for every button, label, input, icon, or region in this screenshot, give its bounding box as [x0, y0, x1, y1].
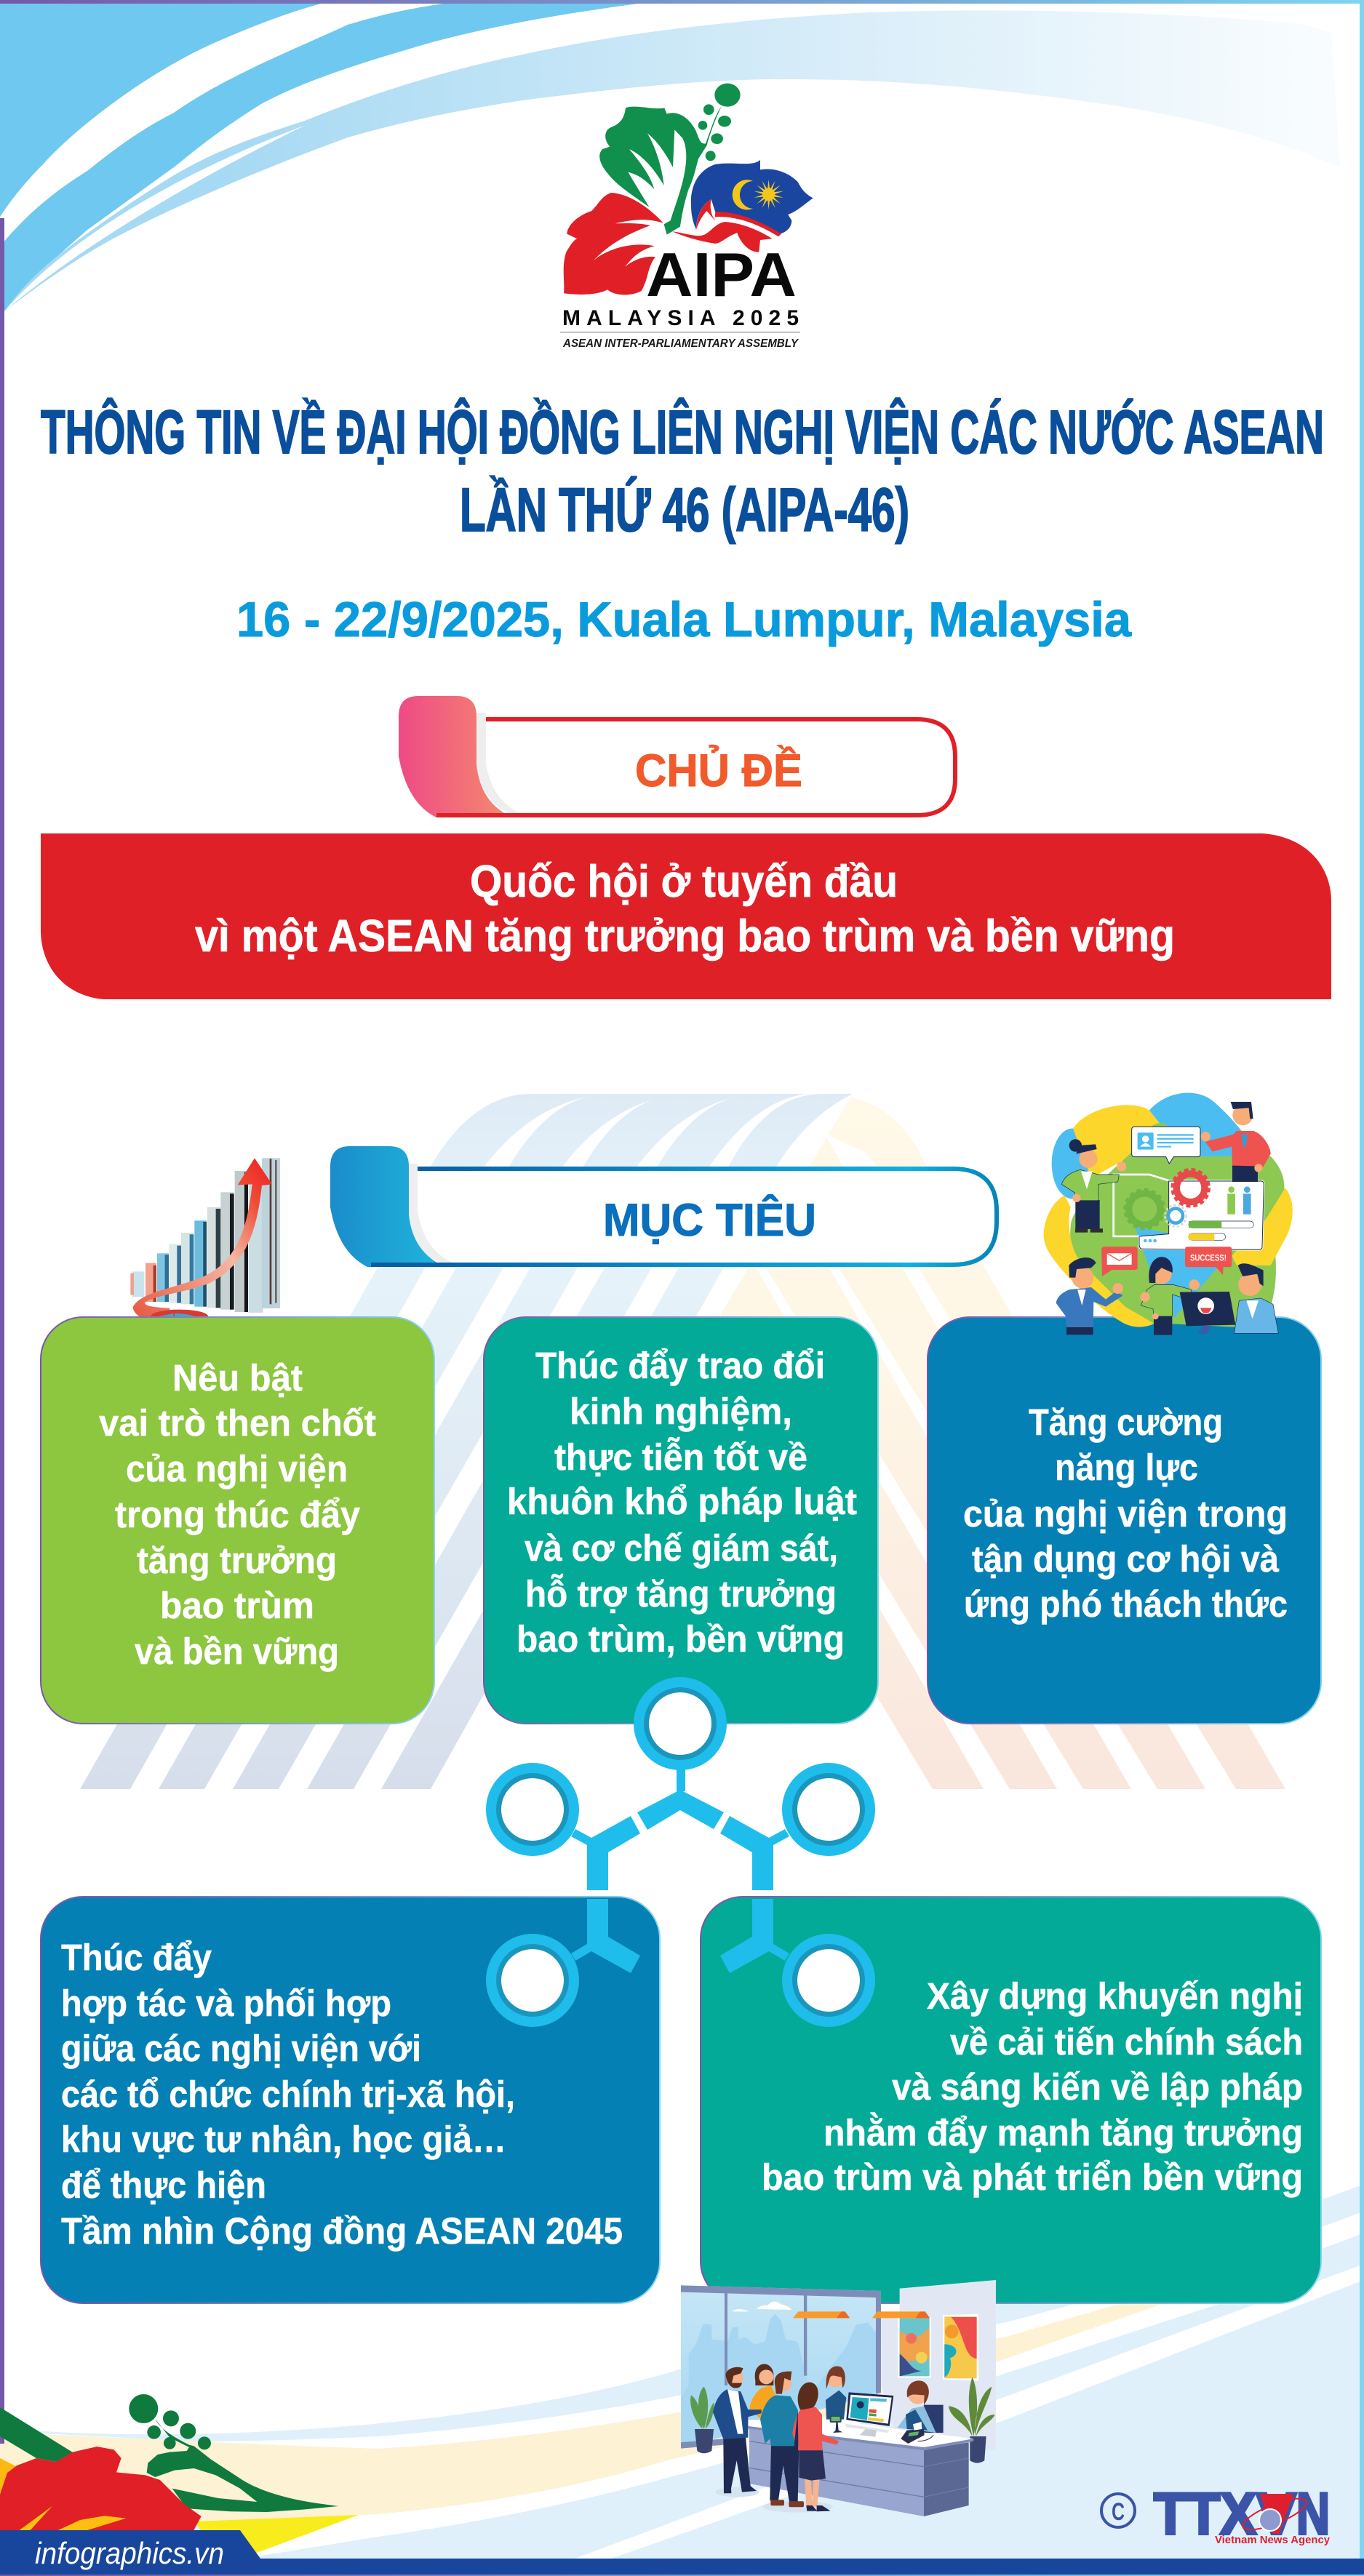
agency wordmark: V [1256, 2481, 1296, 2547]
node bottom left [486, 1934, 579, 2027]
copyright mark [1101, 2494, 1135, 2527]
section header: objectives [330, 1146, 997, 1267]
panel: objective 4: giữa các nghị viện với [61, 2028, 421, 2069]
logo subtitle: MALAYSIA 2025 [562, 306, 799, 330]
agency tagline: Vietnam News Agency [1215, 2534, 1331, 2546]
copyright mark: C [1112, 2498, 1125, 2526]
panel: objective 1: trong thúc đẩy [115, 1494, 361, 1535]
title [41, 398, 1324, 544]
logo: AIPA Malaysia 2025 [560, 84, 813, 350]
logo tagline: ASEAN INTER-PARLIAMENTARY ASSEMBLY [562, 337, 799, 350]
panel: objective 4 [41, 1897, 660, 2303]
panel: objective 5: Xây dựng khuyến nghị [927, 1975, 1303, 2017]
panel: objective 1: bao trùm [160, 1585, 314, 1626]
footer bar [0, 2530, 1364, 2576]
person top right [1201, 1102, 1271, 1182]
logo wordmark AIPA: AIPA [646, 241, 797, 310]
whiteboard [1114, 1175, 1264, 1249]
panel: objective 2: thực tiễn tốt về [554, 1436, 807, 1478]
panel: objective 4: Tầm nhìn Cộng đồng ASEAN 2045 [61, 2210, 623, 2252]
node middle left [486, 1763, 579, 1856]
icon: rising bar chart [130, 1158, 280, 1324]
receptionist left [826, 2391, 846, 2420]
theme heading: CHỦ ĐỀ [635, 745, 802, 796]
panel: objective 2: và cơ chế giám sát, [525, 1527, 838, 1569]
visitor man teal [760, 2372, 804, 2507]
illustration: office reception [681, 2280, 996, 2516]
panel: theme statement: Quốc hội ở tuyến đầu [470, 857, 898, 907]
panel: objective 1: Nêu bật [172, 1357, 303, 1399]
footer site name: infographics.vn [35, 2536, 224, 2570]
payment terminal [901, 2429, 925, 2444]
monitor [846, 2392, 893, 2426]
date and place: 16 - 22/9/2025, Kuala Lumpur, Malaysia [236, 592, 1132, 647]
person at laptop [1180, 1263, 1278, 1334]
panel: objective 4: Thúc đẩy [61, 1937, 212, 1978]
illustration: flower bottom left [0, 2394, 338, 2532]
panel: objective 2: bao trùm, bền vững [517, 1618, 845, 1660]
panel: objective 5: và sáng kiến về lập pháp [892, 2066, 1303, 2108]
visitor woman red [792, 2383, 839, 2511]
visitor woman orange [755, 2364, 773, 2385]
background: lower swoosh bands [0, 2184, 1364, 2560]
panel: objective 2 [484, 1317, 878, 1724]
gears [1125, 1169, 1209, 1229]
speech bubbles [1132, 1127, 1200, 1164]
plants [690, 2377, 995, 2463]
panel: objective 3: ứng phó thách thức [964, 1583, 1288, 1625]
panel: objective 4: các tổ chức chính trị-xã hội, [61, 2073, 515, 2115]
panel: objective 1: của nghị viện [126, 1448, 348, 1489]
pendant lamps [793, 2311, 850, 2318]
background: arched ribbon stripes [80, 1094, 1285, 1789]
objectives heading: MỤC TIÊU [603, 1194, 816, 1246]
agency wordmark [1154, 2481, 1330, 2547]
panel: objective 5: bao trùm và phát triển bền vững [762, 2156, 1303, 2198]
panel: objective 5 [701, 1897, 1321, 2303]
panel: objective 2: Thúc đẩy trao đổi [535, 1345, 825, 1386]
title: LẦN THỨ 46 (AIPA-46) [460, 476, 909, 544]
node bottom right [782, 1934, 875, 2027]
receptionist right [924, 2405, 944, 2433]
person top left [1061, 1139, 1126, 1233]
visitor man blue suit [713, 2367, 762, 2493]
panel: objective 3 [928, 1317, 1321, 1724]
panel: objective 1 [41, 1317, 434, 1724]
panel: objective 1: và bền vững [135, 1631, 339, 1672]
TTXVN logo [1101, 2481, 1331, 2547]
logo flower [564, 84, 813, 295]
agency wordmark: N [1296, 2481, 1330, 2547]
panel: objective 4: hợp tác và phối hợp [61, 1983, 391, 2024]
panel: objective 2: hỗ trợ tăng trưởng [525, 1573, 837, 1615]
node top [634, 1677, 727, 1770]
section header: theme [399, 696, 955, 817]
background: top swooshes [0, 0, 1340, 320]
panel: objective 3: năng lực [1055, 1447, 1198, 1488]
panel: objective 1: tăng trưởng [137, 1540, 337, 1581]
panel: theme statement [41, 833, 1331, 999]
person bottom centre [1140, 1257, 1200, 1335]
panel: objective 5: nhằm đẩy mạnh tăng trưởng [823, 2111, 1303, 2153]
connector diagram [486, 1677, 875, 2027]
success label: SUCCESS! [1190, 1252, 1227, 1263]
panel: objective 2: khuôn khổ pháp luật [507, 1481, 857, 1522]
red V and globe [1240, 2492, 1309, 2536]
wall paintings [898, 2314, 978, 2380]
panel: objective 4: để thực hiện [61, 2164, 266, 2206]
panel: objective 3: của nghị viện trong [963, 1493, 1288, 1535]
panel: objective 1: vai trò then chốt [99, 1402, 376, 1444]
agency wordmark: TTX [1154, 2481, 1256, 2547]
node middle right [782, 1763, 875, 1856]
reception desk [749, 2427, 924, 2516]
panel: objective 2: kinh nghiệm, [570, 1391, 792, 1432]
icon: team with gears [1044, 1093, 1293, 1335]
back wall [881, 2280, 996, 2451]
panel: objective 5: về cải tiến chính sách [950, 2021, 1303, 2063]
panel: objective 4: khu vực tư nhân, học giả… [61, 2119, 506, 2160]
panel: objective 3: tận dụng cơ hội và [972, 1538, 1280, 1580]
shadows [715, 2487, 759, 2497]
person bottom left [1056, 1257, 1123, 1335]
panel: objective 3: Tăng cường [1029, 1401, 1223, 1443]
panel: theme statement: vì một ASEAN tăng trưởng bao trùm và bền vững [195, 911, 1175, 961]
window [681, 2285, 881, 2449]
